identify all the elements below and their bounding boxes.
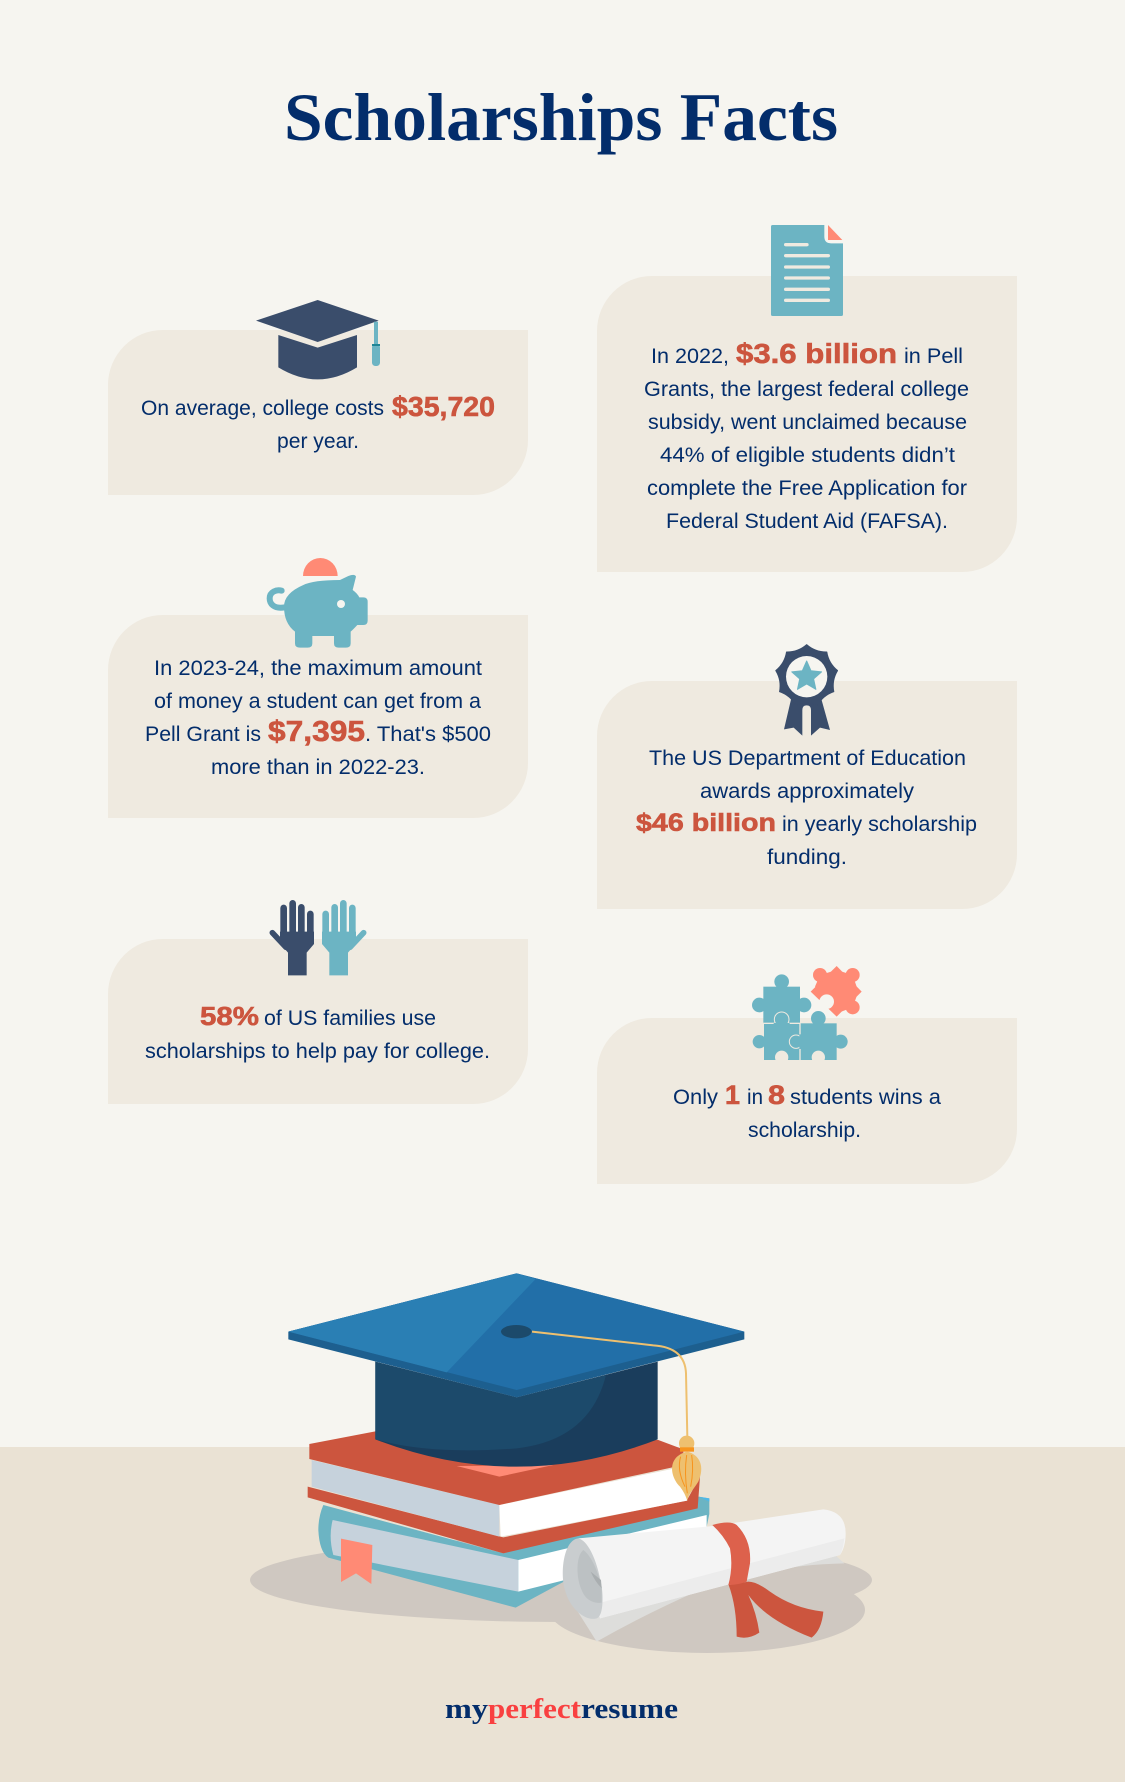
logo: myperfectresume: my bbox=[445, 1693, 489, 1725]
icon: large graduation cap bbox=[288, 1273, 744, 1501]
text: families using scholarships: of US families use bbox=[264, 1007, 436, 1030]
panel: one in eight bbox=[597, 966, 1017, 1184]
title: Scholarships Facts bbox=[284, 79, 838, 155]
icon: document bbox=[771, 225, 843, 316]
panel: families using scholarships bbox=[108, 903, 528, 1104]
text: maximum Pell Grant bbox=[145, 657, 491, 779]
text: maximum Pell Grant: more than in 2022-23. bbox=[211, 756, 425, 779]
text: college cost: On average, college costs bbox=[141, 397, 384, 420]
text: one in eight: 1 bbox=[725, 1080, 740, 1110]
text: one in eight: in bbox=[747, 1086, 763, 1109]
text: families using scholarships: scholarships to help pay for college. bbox=[145, 1040, 490, 1063]
text: Department of Education awards bbox=[636, 747, 977, 869]
icon: piggy bank bbox=[270, 558, 368, 648]
text: Department of Education awards: The US Department of Education bbox=[649, 747, 966, 770]
text: college cost: per year. bbox=[277, 430, 359, 453]
icon: diploma scroll bbox=[563, 1509, 846, 1642]
panel: Department of Education awards bbox=[597, 645, 1017, 909]
icon: puzzle pieces bbox=[752, 966, 862, 1064]
logo: myperfectresume: perfect bbox=[488, 1693, 581, 1725]
text: Pell Grants unclaimed: In 2022, bbox=[651, 345, 729, 368]
text: one in eight: Only bbox=[673, 1086, 719, 1109]
text: one in eight: students wins a bbox=[790, 1086, 941, 1109]
text: Department of Education awards: in yearly scholarship bbox=[782, 813, 977, 836]
text: maximum Pell Grant: In 2023-24, the maximum amount bbox=[154, 657, 482, 680]
icon: raised hands bbox=[272, 903, 364, 975]
text: Pell Grants unclaimed: subsidy, went unclaimed because bbox=[648, 411, 967, 434]
panel: maximum Pell Grant bbox=[108, 558, 528, 818]
panel: college cost bbox=[108, 300, 528, 495]
book: lower teal book bbox=[318, 1497, 709, 1608]
text: college cost: $35,720 bbox=[392, 391, 495, 422]
text: one in eight: scholarship. bbox=[748, 1119, 861, 1142]
text: Department of Education awards: $46 billion bbox=[636, 809, 776, 837]
text: Department of Education awards: funding. bbox=[767, 846, 847, 869]
text: Pell Grants unclaimed: Grants, the largest federal college bbox=[644, 378, 969, 401]
text: maximum Pell Grant: . That's $500 bbox=[365, 723, 491, 746]
logo: myperfectresume: resume bbox=[581, 1693, 678, 1725]
text: one in eight bbox=[673, 1080, 941, 1142]
book: upper red book bbox=[308, 1431, 700, 1553]
text: families using scholarships bbox=[145, 1001, 490, 1063]
text: maximum Pell Grant: $7,395 bbox=[268, 716, 365, 748]
text: college cost bbox=[141, 391, 495, 453]
text: maximum Pell Grant: Pell Grant is bbox=[145, 723, 261, 746]
text: Pell Grants unclaimed: 44% of eligible students didn’t bbox=[660, 444, 955, 467]
panel: Pell Grants unclaimed bbox=[597, 225, 1017, 572]
text: Pell Grants unclaimed: complete the Free Application for bbox=[647, 477, 967, 500]
text: Pell Grants unclaimed bbox=[644, 338, 969, 533]
text: Pell Grants unclaimed: $3.6 billion bbox=[736, 338, 897, 369]
text: one in eight: 8 bbox=[768, 1080, 785, 1110]
text: families using scholarships: 58% bbox=[200, 1001, 259, 1031]
illustration: cap, books and diploma bbox=[250, 1273, 872, 1653]
text: maximum Pell Grant: of money a student can get from a bbox=[154, 690, 481, 713]
text: Pell Grants unclaimed: Federal Student Aid (FAFSA). bbox=[666, 510, 948, 533]
icon: graduation cap bbox=[256, 300, 380, 379]
text: Pell Grants unclaimed: in Pell bbox=[904, 345, 963, 368]
text: Department of Education awards: awards approximately bbox=[700, 780, 915, 803]
shadow under books and diploma bbox=[250, 1538, 872, 1653]
icon: award ribbon bbox=[776, 645, 838, 736]
logo: myperfectresume bbox=[445, 1693, 678, 1725]
